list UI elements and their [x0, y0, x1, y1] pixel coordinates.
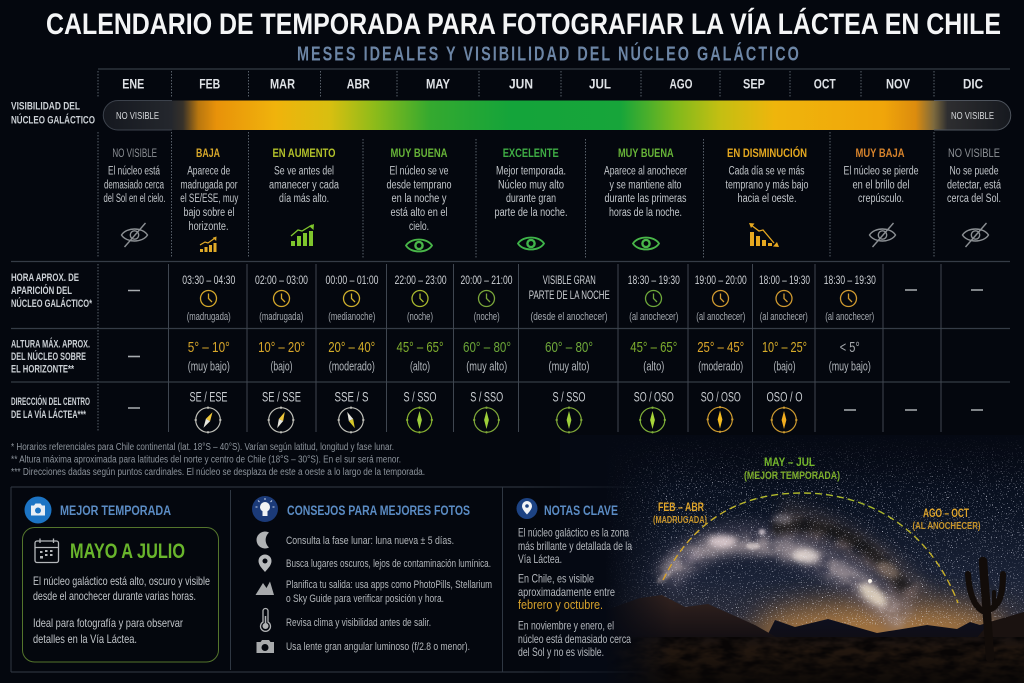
column: febrero: bajo sobre el	[184, 207, 234, 219]
row: altura máxima: 10° – 25°	[762, 339, 807, 356]
row: hora de aparición: PARTE DE LA NOCHE	[529, 288, 610, 302]
label: may jul: (MEJOR TEMPORADA)	[744, 470, 840, 482]
note 1	[518, 526, 632, 566]
column: septiembre: Cada día se ve más	[728, 166, 805, 178]
description: detalles en la Vía Láctea.	[33, 632, 137, 646]
icon: camera badge	[24, 496, 52, 524]
column: marzo abril: amanecer y cada	[269, 180, 339, 192]
column: mayo: MUY BUENA	[390, 146, 448, 160]
row: dirección: SO / OSO	[634, 390, 674, 404]
column: febrero: horizonte.	[188, 221, 228, 233]
row: hora de aparición: 19:00 – 20:00	[695, 273, 747, 287]
column: junio: EXCELENTE	[503, 146, 559, 160]
column: diciembre: detectar, está	[947, 180, 1001, 192]
month headers: AGO	[670, 76, 693, 92]
row: hora de aparición: 00:00 – 01:00	[326, 273, 379, 287]
row: hora de aparición: (al anochecer)	[760, 311, 808, 323]
label: may jul	[744, 455, 840, 482]
tip: mountains: o Sky Guide para verificar posición y hora.	[286, 593, 444, 605]
row: hora de aparición: (madrugada)	[187, 311, 231, 323]
label: ago oct: (AL ANOCHECER)	[912, 520, 980, 532]
column: julio agosto: y se mantiene alto	[610, 180, 682, 192]
description: desde el anochecer durante varias horas.	[33, 589, 196, 603]
label: may jul: MAY – JUL	[764, 455, 815, 469]
month headers: ENE	[122, 76, 144, 92]
milky way arch	[655, 515, 925, 620]
row: hora de aparición: VISIBLE GRAN	[543, 273, 596, 287]
row label: DIRECCIÓN DEL CENTRO	[11, 395, 90, 408]
note 1: Vía Láctea.	[518, 552, 562, 566]
heading: NOTAS CLAVE	[544, 503, 618, 518]
column: septiembre: temprano y más bajo	[726, 180, 808, 192]
column: diciembre: No se puede	[950, 166, 998, 178]
row label: ALTURA MÁX. APROX.	[11, 338, 90, 350]
row: hora de aparición: 22:00 – 23:00	[395, 273, 447, 287]
month headers: MAR	[270, 76, 295, 92]
column: febrero: el SE/ESE, muy	[180, 193, 238, 205]
row: altura máxima: (bajo)	[270, 360, 292, 374]
row: hora de aparición: (madrugada)	[259, 311, 303, 323]
note 1: El núcleo galáctico es la zona	[518, 526, 629, 540]
stars	[600, 435, 1024, 625]
row: dirección: S / SSO	[404, 390, 436, 404]
label: feb abr: FEB – ABR	[658, 502, 705, 514]
row label	[11, 338, 90, 376]
icons: clocks	[200, 290, 856, 306]
row: hora de aparición: (al anochecer)	[825, 311, 874, 323]
row label: HORA APROX. DE	[11, 272, 79, 284]
column: julio agosto	[604, 146, 687, 250]
row: altura máxima: (alto)	[410, 360, 430, 374]
row label: DEL NÚCLEO SOBRE	[11, 350, 86, 363]
column: mayo: desde temprano	[386, 180, 452, 192]
visibility row label: NÚCLEO GALÁCTICO	[11, 114, 95, 126]
column: enero: demasiado cerca	[104, 180, 164, 192]
headline: MAYO A JULIO	[70, 540, 185, 563]
column: junio: Mejor temporada.	[496, 166, 566, 178]
row: dirección: S / SSO	[470, 390, 503, 404]
row: altura máxima: 45° – 65°	[630, 339, 677, 356]
column: febrero: madrugada por	[180, 180, 238, 192]
row: altura máxima: 60° – 80°	[463, 339, 511, 356]
month headers: DIC	[963, 76, 983, 92]
footnotes	[11, 442, 425, 478]
description: Ideal para fotografía y para observar	[33, 616, 183, 630]
row: hora de aparición: (desde el anochecer)	[530, 311, 608, 323]
row: hora de aparición: (al anochecer)	[696, 311, 745, 323]
column: octubre noviembre: MUY BAJA	[856, 146, 905, 160]
night sky photo illustration	[560, 435, 1024, 683]
note 2: febrero y octubre.	[518, 598, 603, 612]
icon: light bulb badge	[252, 496, 278, 522]
row label	[11, 272, 92, 310]
note 3: núcleo está demasiado cerca	[518, 632, 631, 646]
note 3	[518, 618, 631, 659]
column: julio agosto: durante las primeras	[604, 193, 687, 205]
icon: eye	[518, 238, 544, 250]
tip: location	[258, 554, 491, 572]
month headers: NOV	[886, 76, 911, 92]
row: dirección: SSE / S	[334, 390, 368, 404]
column: junio	[494, 146, 568, 250]
column: marzo abril	[269, 146, 339, 246]
heading: CONSEJOS PARA MEJORES FOTOS	[287, 503, 470, 518]
month headers	[122, 76, 983, 92]
column: octubre noviembre: crepúsculo.	[858, 193, 904, 205]
column: octubre noviembre: en el brillo del	[852, 180, 910, 192]
column: mayo: El núcleo se ve	[390, 166, 448, 178]
label: ago oct: AGO – OCT	[923, 508, 969, 520]
row: hora de aparición: (noche)	[474, 311, 500, 323]
column: septiembre: EN DISMINUCIÓN	[727, 145, 807, 160]
subtitle: MESES IDEALES Y VISIBILIDAD DEL NÚCLEO GALÁCTICO	[297, 42, 799, 65]
icon: eye off	[122, 223, 148, 247]
row: altura máxima: 25° – 45°	[697, 339, 744, 356]
row: altura máxima: (moderado)	[329, 360, 375, 374]
footnotes: ** Altura máxima aproximada para latitudes del norte y centro de Chile (18°S – 30°S). En el sur será menor.	[11, 454, 401, 466]
icon: pin badge	[516, 498, 538, 519]
column: septiembre	[726, 145, 808, 247]
column: julio agosto: horas de la noche.	[609, 207, 682, 219]
column: enero	[104, 146, 166, 247]
best season card	[22, 528, 218, 662]
note 3: del Sol y no es visible.	[518, 645, 604, 659]
note 2	[518, 572, 615, 612]
label: feb abr	[653, 502, 707, 526]
column: enero: NO VISIBLE	[112, 146, 157, 160]
bottom panel frame	[11, 487, 650, 672]
icon: eye off	[962, 223, 988, 247]
icon: eye off	[870, 223, 896, 247]
visibility gradient bar: NO VISIBLE	[951, 110, 994, 122]
month headers: SEP	[743, 76, 765, 92]
month headers: FEB	[199, 76, 220, 92]
column: enero: del Sol en el cielo.	[104, 193, 166, 205]
column: febrero: BAJA	[196, 146, 220, 160]
visibility row label: VISIBILIDAD DEL	[11, 100, 80, 112]
row label: EL HORIZONTE**	[11, 364, 74, 376]
column: octubre noviembre	[844, 146, 918, 247]
mountains	[600, 595, 1024, 650]
grid lines	[11, 69, 1010, 432]
cactus	[968, 561, 1003, 658]
row: hora de aparición: 03:30 – 04:30	[182, 273, 236, 287]
tip: location: Busca lugares oscuros, lejos de contaminación lumínica.	[286, 558, 491, 570]
note 2: aproximadamente entre	[518, 585, 615, 599]
row: altura máxima: (bajo)	[774, 360, 796, 374]
row: altura máxima: (muy bajo)	[829, 360, 871, 374]
row: altura máxima: (moderado)	[698, 360, 743, 374]
column: diciembre	[947, 146, 1001, 247]
month headers: JUL	[589, 76, 611, 92]
description: El núcleo galáctico está alto, oscuro y visible	[33, 574, 210, 588]
row: hora de aparición: (medianoche)	[328, 311, 375, 323]
left fade	[560, 435, 1024, 683]
panel: notas clave	[516, 498, 632, 659]
column: junio: Núcleo muy alto	[498, 180, 564, 192]
description	[33, 574, 210, 646]
row: dirección	[11, 390, 983, 434]
row label	[11, 395, 90, 421]
heading: MEJOR TEMPORADA	[60, 503, 171, 518]
row: altura máxima: 45° – 65°	[396, 339, 444, 356]
row: hora de aparición: 18:30 – 19:30	[628, 273, 680, 287]
column: marzo abril: EN AUMENTO	[272, 146, 336, 160]
month headers: MAY	[426, 76, 451, 92]
month headers: OCT	[814, 76, 836, 92]
row: hora de aparición: 18:00 – 19:30	[759, 273, 810, 287]
row label: APARICIÓN DEL	[11, 284, 72, 297]
row: hora de aparición: 20:00 – 21:00	[460, 273, 513, 287]
row: dirección: S / SSO	[552, 390, 586, 404]
row: altura máxima: 20° – 40°	[328, 339, 375, 356]
column: septiembre: hacia el oeste.	[738, 193, 796, 205]
column: febrero	[180, 146, 238, 252]
row: altura máxima: (muy alto)	[548, 360, 590, 374]
icon: rising chart	[291, 224, 314, 246]
row: dirección: OSO / O	[766, 390, 802, 404]
footnotes: * Horarios referenciales para Chile continental (lat. 18°S – 40°S). Varían según latitud, longitud y fase lunar.	[11, 442, 394, 453]
row: hora de aparición: (al anochecer)	[629, 311, 678, 323]
tip: thermometer	[261, 608, 431, 631]
column: mayo: cielo.	[409, 221, 429, 233]
column: enero: El núcleo está	[108, 166, 160, 178]
season arc	[663, 493, 958, 603]
tip: camera: Usa lente gran angular luminoso (f/2.8 o menor).	[286, 641, 470, 653]
footnotes: *** Direcciones dadas según puntos cardinales. El núcleo se desplaza de este a oeste a lo largo de la temporada.	[11, 467, 425, 478]
horizon glow	[755, 602, 1005, 654]
note 1: más brillante y detallada de la	[518, 539, 632, 553]
label: feb abr: (MADRUGADA)	[653, 514, 707, 526]
tip: moon: Consulta la fase lunar: luna nueva ± 5 días.	[286, 535, 454, 547]
row: hora de aparición: 02:00 – 03:00	[255, 273, 308, 287]
column: mayo: está alto en el	[390, 207, 448, 219]
month headers: ABR	[347, 76, 370, 92]
column: julio agosto: Aparece al anochecer	[604, 166, 687, 178]
column: junio: parte de la noche.	[494, 207, 568, 219]
icon: eye	[633, 238, 659, 250]
tip: mountains	[256, 579, 492, 605]
panel: consejos	[252, 496, 492, 653]
column: mayo: en la noche y	[392, 193, 447, 205]
row: altura máxima: (alto)	[643, 360, 664, 374]
row: dirección: SE / ESE	[190, 390, 228, 404]
row: hora de aparición	[11, 272, 983, 323]
sky	[600, 435, 1024, 640]
row: dirección: SO / OSO	[701, 390, 741, 404]
icon: eye	[406, 240, 432, 252]
icons: compasses	[194, 406, 798, 434]
visibility row label	[11, 100, 95, 126]
icon: calendar	[35, 538, 58, 562]
row: altura máxima	[11, 338, 871, 376]
icon: small rising chart	[200, 236, 216, 252]
note 3: En noviembre y enero, el	[518, 618, 614, 632]
note 2: En Chile, es visible	[518, 572, 594, 586]
column: mayo	[386, 146, 452, 252]
icon: falling chart	[749, 223, 779, 247]
row: altura máxima: < 5°	[840, 339, 860, 356]
column: marzo abril: día más alto.	[279, 193, 329, 205]
column: diciembre: cerca del Sol.	[947, 193, 1001, 205]
row: altura máxima: (muy alto)	[466, 360, 507, 374]
row: altura máxima: (muy bajo)	[188, 360, 230, 374]
row label: DE LA VÍA LÁCTEA***	[11, 408, 86, 421]
tip: moon	[256, 532, 454, 548]
visibility gradient bar: NO VISIBLE	[116, 110, 159, 122]
panel: mejor temporada	[22, 496, 218, 662]
column: junio: durante gran	[506, 193, 556, 205]
label: ago oct	[912, 508, 980, 532]
visibility gradient bar	[103, 100, 1011, 130]
row: altura máxima: 60° – 80°	[545, 339, 593, 356]
row: hora de aparición: (noche)	[407, 311, 433, 323]
tip: mountains: Planifica tu salida: usa apps como PhotoPills, Stellarium	[286, 579, 492, 591]
row: dirección: SE / SSE	[262, 390, 301, 404]
column: julio agosto: MUY BUENA	[618, 146, 674, 160]
row: hora de aparición: 18:30 – 19:30	[824, 273, 876, 287]
tip: camera	[256, 640, 470, 653]
column: diciembre: NO VISIBLE	[948, 146, 1000, 160]
row label: NÚCLEO GALÁCTICO*	[11, 297, 92, 310]
row: altura máxima: 10° – 20°	[258, 339, 305, 356]
ground	[600, 637, 1024, 683]
column: marzo abril: Se ve antes del	[274, 166, 334, 178]
calendar table	[11, 69, 1011, 434]
row: altura máxima: 5° – 10°	[188, 339, 230, 356]
tip: thermometer: Revisa clima y visibilidad antes de salir.	[286, 617, 431, 629]
month headers: JUN	[509, 76, 533, 92]
column: octubre noviembre: El núcleo se pierde	[844, 166, 918, 178]
column: febrero: Aparece de	[187, 166, 230, 178]
